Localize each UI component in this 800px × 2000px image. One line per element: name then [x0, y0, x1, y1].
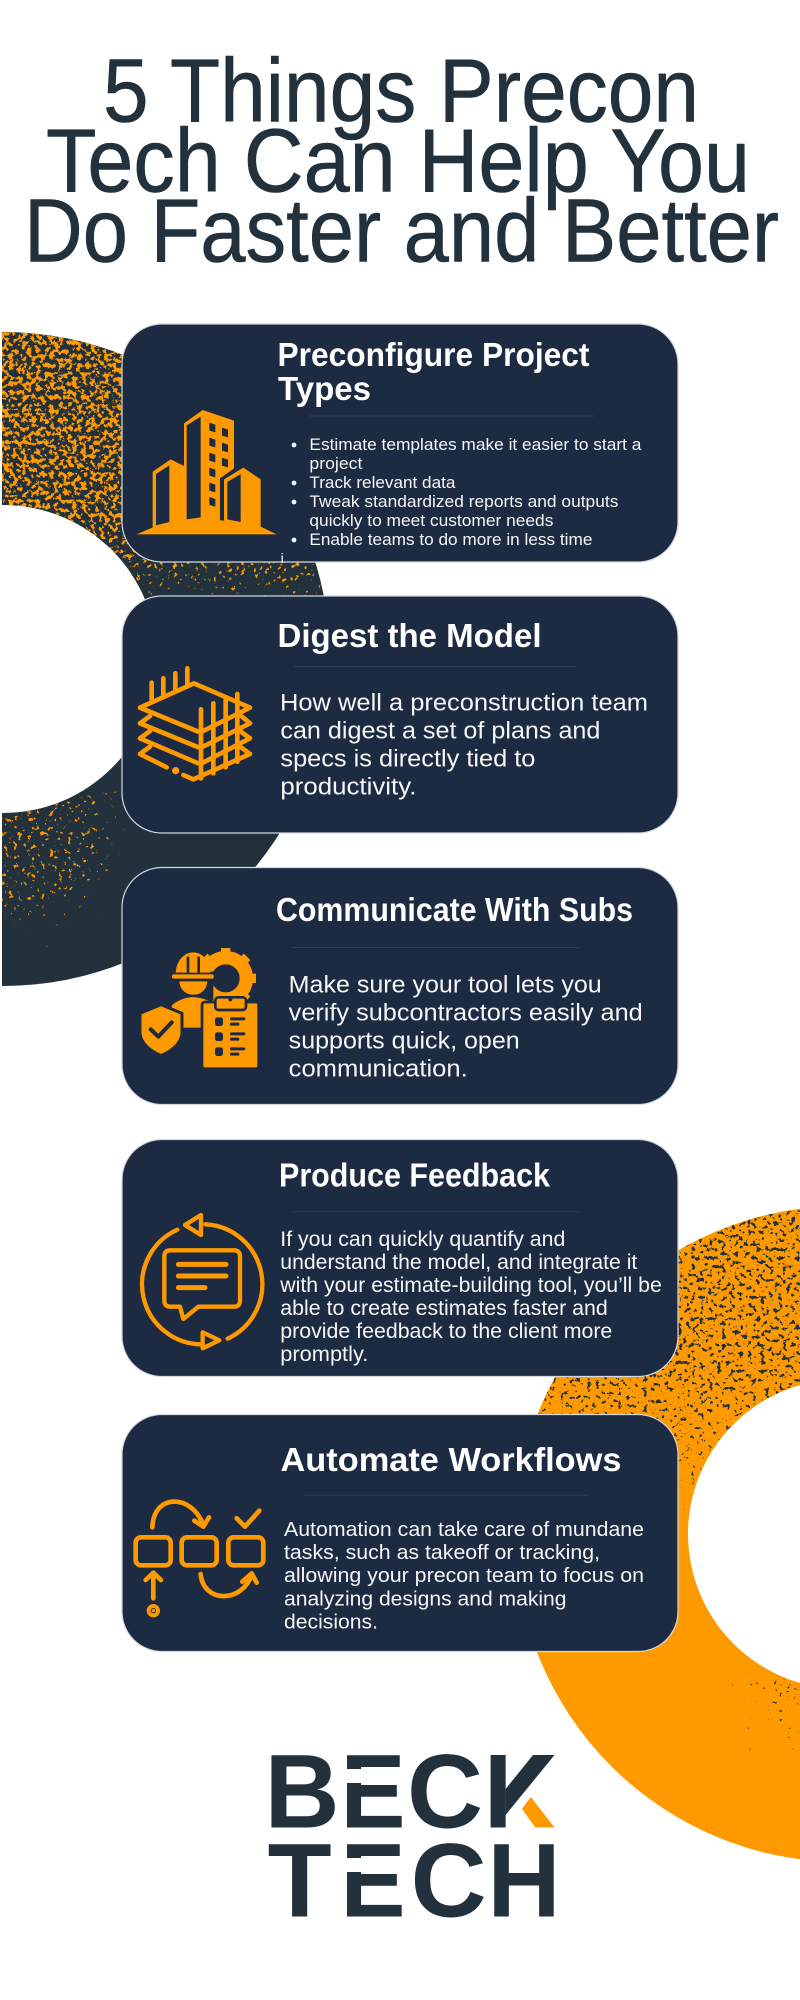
bullet list — [292, 436, 642, 549]
logo: beck tech: T — [268, 1822, 332, 1940]
divider — [292, 946, 579, 948]
heading: digest the model: Digest the Model — [278, 617, 542, 654]
body text: able to create estimates faster and — [280, 1297, 608, 1320]
heading: automate workflows: Automate Workflows — [280, 1441, 622, 1478]
logo: beck tech: H — [488, 1822, 560, 1940]
body text: tasks, such as takeoff or tracking, — [284, 1542, 600, 1564]
logo: beck tech — [264, 1734, 566, 1940]
body text: can digest a set of plans and — [280, 718, 600, 745]
logo: beck tech: C — [407, 1734, 483, 1850]
panel: automate workflows — [122, 1414, 678, 1652]
panel: preconfigure project types — [122, 324, 678, 566]
icon: workflow steps — [136, 1502, 263, 1615]
divider — [293, 1211, 579, 1213]
divider — [304, 1494, 588, 1496]
body text — [284, 1519, 644, 1634]
body text: How well a preconstruction team — [280, 690, 648, 717]
title: 5 Things Precon — [103, 42, 699, 142]
panel: digest the model — [122, 596, 678, 833]
bullet list: quickly to meet customer needs — [309, 512, 553, 530]
logo: beck tech: E — [340, 1734, 406, 1850]
body text: productivity. — [280, 774, 416, 801]
body text: specs is directly tied to — [280, 745, 535, 772]
body text: analyzing designs and making — [284, 1588, 566, 1610]
body text: communication. — [289, 1056, 468, 1083]
icon: feedback cycle with chat bubble — [142, 1215, 262, 1348]
logo: beck tech: K — [485, 1734, 556, 1850]
decorative ring: orange speckled right — [515, 1206, 800, 1862]
body text — [289, 972, 643, 1083]
body text — [280, 690, 648, 801]
bullet list: Enable teams to do more in less time — [309, 531, 592, 549]
bullet list: Tweak standardized reports and outputs — [309, 493, 618, 511]
bullet list: Estimate templates make it easier to start a — [309, 436, 642, 454]
body text: Make sure your tool lets you — [289, 972, 602, 999]
logo: beck tech: B — [264, 1734, 340, 1850]
icon: buildings — [137, 410, 277, 534]
panel: produce feedback — [122, 1140, 678, 1376]
decorative ring: dark speckled left — [0, 320, 330, 1000]
heading: preconfigure project types: Preconfigure Project — [278, 336, 590, 373]
panel: communicate with subs — [122, 868, 678, 1104]
body text: verify subcontractors easily and — [289, 1000, 643, 1027]
body text: Automation can take care of mundane — [284, 1519, 644, 1541]
body text: provide feedback to the client more — [280, 1320, 612, 1343]
body text: allowing your precon team to focus on — [284, 1565, 644, 1587]
heading: produce feedback: Produce Feedback — [279, 1157, 551, 1194]
logo: beck tech: E — [340, 1822, 406, 1940]
body text: with your estimate-building tool, you’ll be — [279, 1274, 662, 1297]
bullet list: project — [309, 455, 363, 473]
body text: If you can quickly quantify and — [280, 1228, 565, 1251]
body text: understand the model, and integrate it — [280, 1251, 637, 1274]
body text: promptly. — [280, 1343, 368, 1366]
heading: preconfigure project types — [278, 336, 590, 407]
heading: preconfigure project types: Types — [278, 370, 371, 407]
stray text cursor: i — [281, 550, 284, 566]
title — [24, 42, 779, 282]
icon: worker, gear, shield and clipboard — [140, 948, 259, 1069]
divider — [294, 666, 577, 668]
title: Tech Can Help You — [46, 112, 750, 212]
body text: supports quick, open — [289, 1028, 520, 1055]
bullet list: Track relevant data — [309, 474, 456, 492]
logo: beck tech: C — [411, 1822, 487, 1940]
icon: structural layers — [140, 668, 250, 779]
divider — [309, 415, 594, 417]
heading: communicate with subs: Communicate With Subs — [276, 891, 633, 928]
body text — [279, 1228, 662, 1366]
body text: decisions. — [284, 1612, 378, 1634]
